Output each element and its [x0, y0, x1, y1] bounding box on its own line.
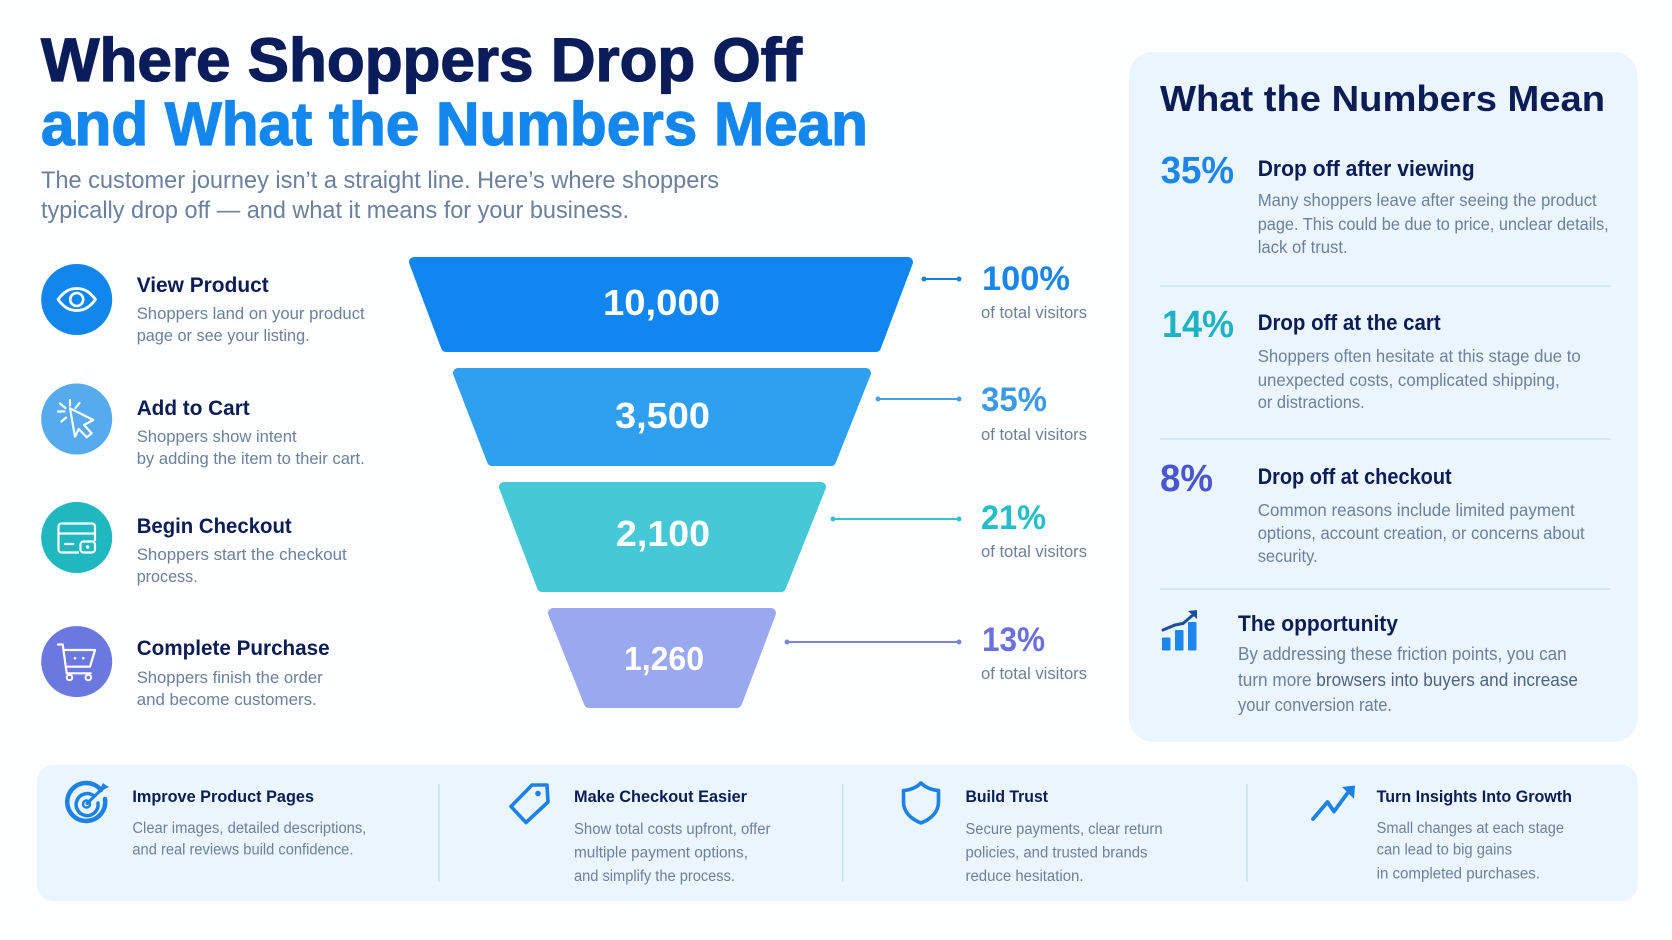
stat: 14%: unexpected costs, complicated shipping, — [1258, 370, 1560, 390]
stage: add to cart: by adding the item to their cart. — [137, 449, 365, 468]
stat: 35%: Many shoppers leave after seeing the product — [1258, 190, 1597, 210]
tip: make checkout easier — [511, 785, 770, 885]
panel: recommendations — [37, 765, 1638, 901]
the opportunity: your conversion rate. — [1238, 695, 1392, 715]
funnel segment: 10,000 — [414, 262, 908, 347]
the opportunity — [1162, 610, 1578, 715]
connector: 21% — [831, 517, 961, 521]
funnel chart — [414, 262, 908, 703]
icon: payment card — [41, 502, 112, 573]
stat: 35% — [1161, 150, 1609, 257]
tip: turn insights into growth: in completed purchases. — [1377, 866, 1540, 882]
tip: make checkout easier: Show total costs upfront, offer — [574, 821, 770, 838]
funnel segment: 10,000: 10,000 — [603, 282, 720, 323]
icon: growth arrow — [1313, 786, 1355, 819]
subtitle: typically drop off — and what it means for your business. — [41, 197, 629, 224]
icon: rising bar chart — [1162, 610, 1197, 650]
funnel segment: 3,500 — [458, 373, 866, 461]
stat: 35%: page. This could be due to price, unclear details, — [1258, 214, 1609, 234]
funnel segment: 2,100: 2,100 — [616, 513, 710, 554]
title: Where Shoppers Drop Off — [41, 26, 803, 94]
stat: 14% — [1162, 304, 1581, 412]
stage: view product: Shoppers land on your product — [137, 304, 365, 323]
tip: build trust: reduce hesitation. — [966, 868, 1084, 885]
funnel segment: 3,500: 3,500 — [615, 395, 710, 436]
title: and What the Numbers Mean — [41, 90, 868, 158]
funnel segment: 2,100 — [504, 487, 821, 587]
stat: 8% — [1160, 458, 1585, 566]
stat: 8%: 8% — [1160, 458, 1213, 500]
stat: 14%: Drop off at the cart — [1258, 310, 1441, 335]
stage: begin checkout: Begin Checkout — [137, 515, 292, 538]
stage: add to cart: Add to Cart — [137, 397, 250, 420]
icon: eye — [41, 264, 112, 335]
funnel percentages: of total visitors — [981, 425, 1087, 444]
stat: 35%: 35% — [1161, 150, 1234, 192]
title — [41, 26, 868, 158]
tip: make checkout easier: and simplify the process. — [574, 868, 735, 885]
tip: turn insights into growth: Turn Insights Into Growth — [1377, 787, 1572, 806]
tip: make checkout easier: multiple payment options, — [574, 844, 748, 862]
the opportunity: By addressing these friction points, you can — [1238, 644, 1567, 664]
funnel percentages: 21% — [981, 499, 1046, 537]
funnel segment: 1,260: 1,260 — [624, 640, 704, 677]
connector: 100% — [922, 277, 961, 281]
stage: view product — [41, 264, 365, 345]
funnel percentages: of total visitors — [981, 303, 1087, 322]
icon: shopping cart — [41, 626, 112, 697]
stat: 35%: Drop off after viewing — [1258, 156, 1475, 181]
stage: view product: View Product — [137, 274, 269, 297]
stage: complete purchase: and become customers. — [137, 690, 317, 709]
icon: price tag — [511, 785, 548, 822]
tip: improve product pages — [67, 783, 366, 858]
the opportunity: turn more browsers into buyers and increase — [1238, 670, 1578, 690]
stat: 8%: Common reasons include limited payment — [1258, 500, 1575, 520]
tip: improve product pages: Clear images, detailed descriptions, — [132, 820, 366, 837]
stage: complete purchase: Shoppers finish the order — [137, 668, 323, 687]
funnel percentages: 35% — [981, 381, 1047, 419]
tip: build trust: policies, and trusted brands — [966, 844, 1148, 862]
icon: target — [67, 783, 109, 821]
tip: improve product pages: Improve Product Pages — [132, 787, 314, 806]
funnel segment: 1,260 — [553, 613, 771, 703]
funnel percentages: of total visitors — [981, 664, 1087, 683]
connector: 35% — [876, 397, 961, 401]
stat: 8%: security. — [1258, 546, 1318, 566]
the opportunity: The opportunity — [1238, 611, 1399, 636]
stage: add to cart — [41, 384, 365, 468]
stat: 8%: Drop off at checkout — [1258, 464, 1452, 489]
tip: turn insights into growth: can lead to big gains — [1377, 842, 1512, 858]
stage: begin checkout — [41, 502, 347, 586]
tip: build trust — [904, 783, 1162, 885]
subtitle — [41, 167, 719, 224]
tip: build trust: Secure payments, clear return — [966, 821, 1162, 838]
stage: complete purchase — [41, 626, 330, 709]
panel heading: What the Numbers Mean — [1160, 78, 1605, 119]
tip: turn insights into growth: Small changes at each stage — [1377, 820, 1564, 837]
stat: 8%: options, account creation, or concerns about — [1258, 523, 1585, 543]
tip: turn insights into growth — [1313, 786, 1572, 882]
icon: shield — [904, 783, 938, 823]
icon: cursor click — [41, 384, 112, 454]
funnel percentages — [785, 260, 1087, 683]
panel: funnel stages — [41, 264, 365, 709]
funnel percentages: of total visitors — [981, 542, 1087, 561]
tip: improve product pages: and real reviews build confidence. — [132, 842, 353, 858]
panel: what the numbers mean — [1129, 52, 1638, 742]
funnel percentages: 100% — [982, 260, 1070, 298]
stage: view product: page or see your listing. — [137, 326, 310, 345]
subtitle: The customer journey isn’t a straight line. Here’s where shoppers — [41, 167, 719, 194]
stage: begin checkout: process. — [137, 567, 198, 586]
connector: 13% — [785, 640, 961, 644]
stage: begin checkout: Shoppers start the checkout — [137, 545, 347, 564]
stat: 14%: or distractions. — [1258, 392, 1365, 412]
stage: add to cart: Shoppers show intent — [137, 427, 297, 446]
stat: 14%: Shoppers often hesitate at this stage due to — [1258, 346, 1581, 366]
tip: build trust: Build Trust — [966, 787, 1048, 806]
stat: 14%: 14% — [1162, 304, 1234, 346]
stage: complete purchase: Complete Purchase — [137, 637, 330, 660]
stat: 35%: lack of trust. — [1258, 237, 1348, 257]
tip: make checkout easier: Make Checkout Easier — [574, 787, 747, 806]
funnel percentages: 13% — [982, 621, 1045, 659]
